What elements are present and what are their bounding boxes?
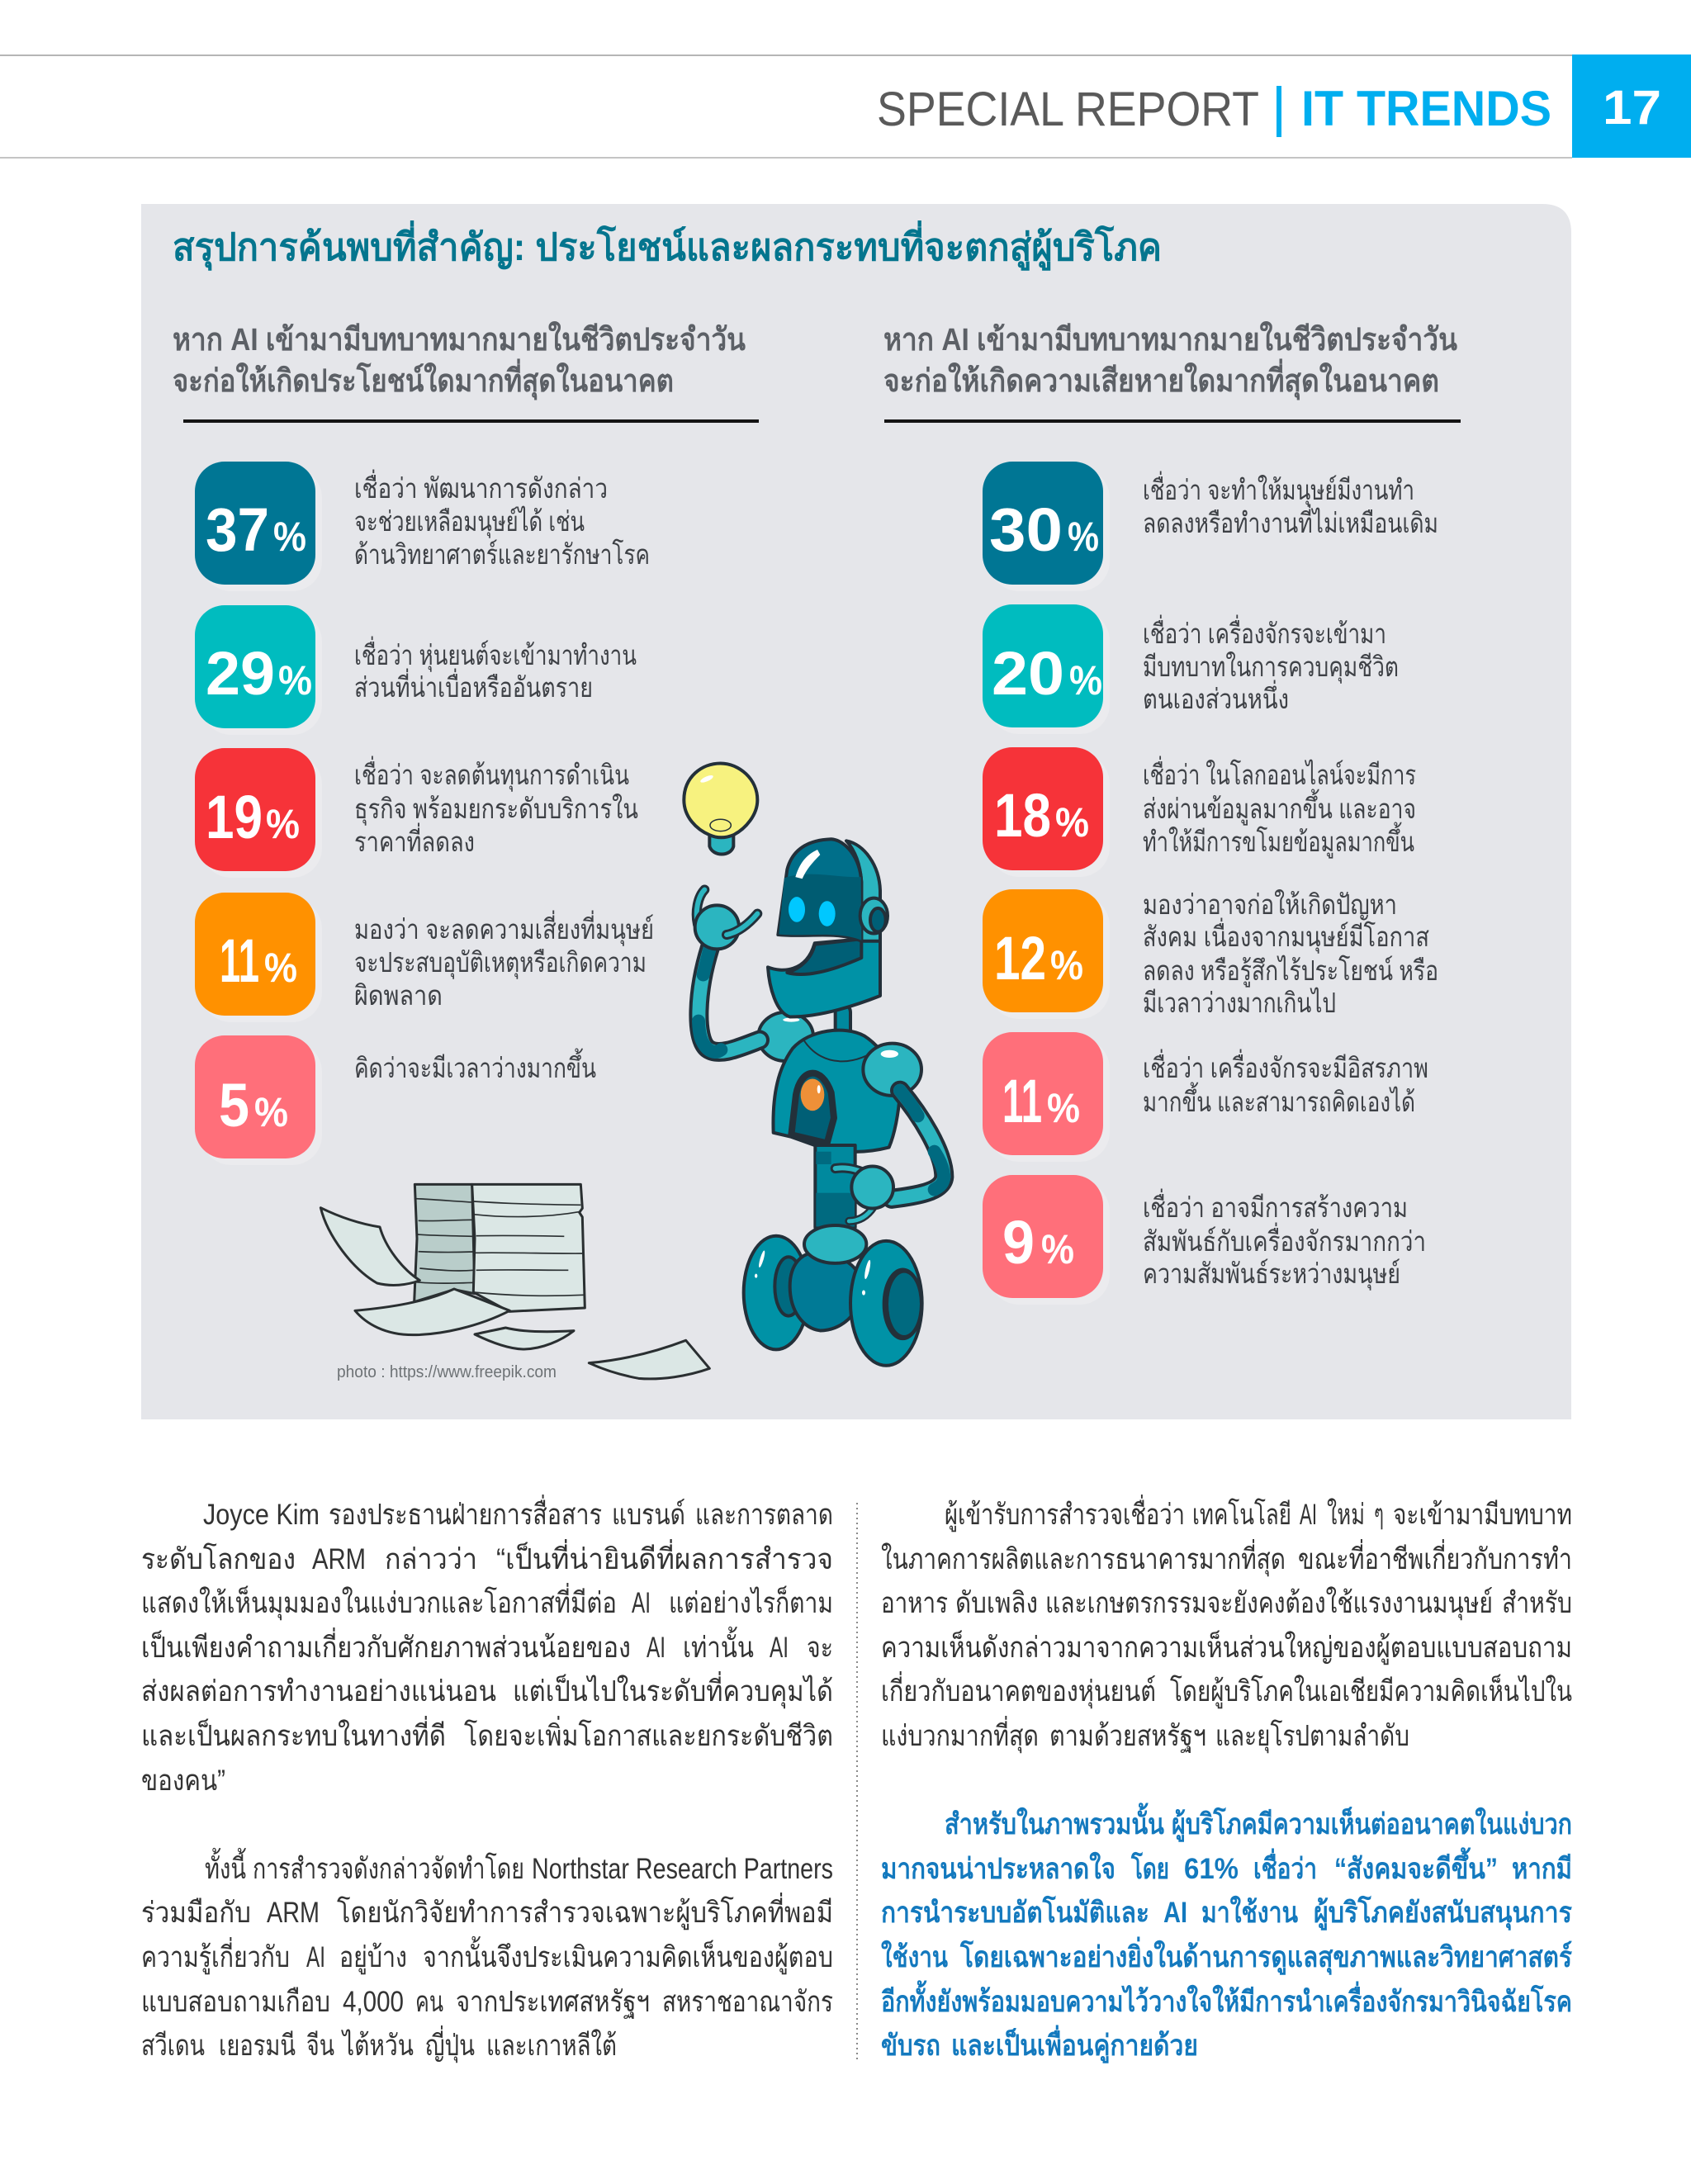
illustration: robot with light bulb: [684, 763, 944, 1366]
paragraph: Joyce Kim quote: AI: [770, 1632, 789, 1664]
benefit item: 19%: [195, 748, 638, 878]
harm item: 12%: %: [1050, 942, 1083, 988]
paragraph: survey method: ความรู้เกี่ยวกับ: [141, 1937, 290, 1974]
paragraph: survey method: โดยนักวิจัยทำการสำรวจเฉพาะผู้บริโภคที่พอมี: [337, 1893, 833, 1930]
robot torso: [773, 1030, 900, 1152]
robot raised arm: [699, 947, 760, 1052]
paragraph: survey method: เยอรมนี: [219, 2030, 296, 2062]
harm item: 18%: %: [1055, 799, 1089, 846]
paragraph: survey method: สหราชอาณาจักร: [662, 1986, 833, 2018]
article: left column: [141, 1495, 833, 2063]
harm item: 12%: มีเวลาว่างมากเกินไป: [1143, 987, 1336, 1019]
harm item: 20%: ตนเองส่วนหนึ่ง: [1143, 680, 1289, 715]
paragraph: survey method: ญี่ปุ่น: [425, 2025, 475, 2063]
paragraph: Joyce Kim quote: และการตลาด: [695, 1499, 833, 1531]
benefit item: 29%: 29: [206, 639, 275, 708]
harm item: 18%: เชื่อว่า ในโลกออนไลน์จะมีการ: [1143, 756, 1416, 791]
benefit item: 29%: %: [278, 657, 312, 704]
paragraph: job sectors: และยุโรปตามลำดับ: [1215, 1719, 1409, 1753]
paragraph: Joyce Kim quote: [141, 1495, 833, 1797]
paragraph: survey method: AI: [306, 1941, 325, 1973]
right column heading: หาก AI เข้ามามีบทบาทมากมายในชีวิตประจำวัน: [883, 321, 1457, 358]
harm item: 20%: %: [1069, 657, 1102, 704]
harm item: 30%: [983, 462, 1438, 591]
benefit item: 37%: 37: [206, 495, 269, 564]
robot back shoulder: [758, 1012, 813, 1061]
harm item: 12%: 12: [994, 924, 1046, 993]
harm item: 12%: สังคม เนื่องจากมนุษย์มีโอกาส: [1143, 917, 1429, 954]
paragraph: job sectors: ตามด้วยสหรัฐฯ: [1049, 1720, 1206, 1753]
harm item: 20%: เชื่อว่า เครื่องจักรจะเข้ามา: [1143, 614, 1386, 650]
photo credit: photo : https://www.freepik.com: [337, 1363, 557, 1381]
paragraph: highlighted conclusion: การนำระบบอัตโนมัติและ: [881, 1895, 1149, 1929]
benefit item: 11%: มองว่า จะลดความเสี่ยงที่มนุษย์: [354, 910, 654, 946]
paragraph: job sectors: ขณะที่อาชีพเกี่ยวกับการทำ: [1298, 1539, 1572, 1575]
harm item: 30%: เชื่อว่า จะทำให้มนุษย์มีงานทำ: [1143, 471, 1414, 507]
paragraph: Joyce Kim quote: แสดงให้เห็นมุมมองในแง่บวกและโอกาสที่มีต่อ: [141, 1583, 617, 1620]
icon: light bulb: [684, 763, 757, 855]
paragraph: job sectors: เทคโนโลยี: [1192, 1498, 1291, 1531]
paragraph: survey method: และเกาหลีใต้: [486, 2029, 617, 2062]
benefit item: 19%: 19: [206, 783, 263, 851]
harm item: 9%: 9: [1002, 1208, 1035, 1277]
harm item: 12%: มองว่าอาจก่อให้เกิดปัญหา: [1143, 889, 1397, 921]
paragraph: Joyce Kim quote: AI: [632, 1587, 651, 1619]
right column heading: จะก่อให้เกิดความเสียหายใดมากที่สุดในอนาคต: [883, 358, 1439, 400]
panel: key findings: [141, 204, 1571, 1419]
paragraph: Joyce Kim quote: กล่าวว่า: [385, 1543, 477, 1575]
paragraph: survey method: Northstar Research Partners: [532, 1853, 833, 1885]
paragraph: Joyce Kim quote: โดยจะเพิ่มโอกาสและยกระดับชีวิต: [464, 1716, 833, 1752]
paragraph: job sectors: ๆ: [1374, 1499, 1384, 1531]
robot head: [768, 839, 888, 1017]
paragraph: survey method: การสำรวจดังกล่าวจัดทำโดย: [253, 1852, 524, 1885]
paragraph: survey method: อยู่บ้าง: [339, 1941, 407, 1974]
harm item: 20%: มีบทบาทในการควบคุมชีวิต: [1143, 651, 1399, 684]
paragraph: job sectors: ความเห็นดังกล่าวมาจากความเห็นส่วนใหญ่ของผู้ตอบแบบสอบถาม: [881, 1630, 1572, 1665]
robot bent arm: [892, 1091, 944, 1199]
robot neck: [836, 1007, 850, 1045]
paragraph: survey method: ทั้งนี้: [205, 1847, 247, 1885]
paragraph: Joyce Kim quote: แบรนด์: [612, 1499, 685, 1531]
paragraph: job sectors: ใหม่: [1327, 1498, 1365, 1531]
robot waist column: [815, 1145, 855, 1227]
paragraph: highlighted conclusion: “สังคมจะดีขึ้น”: [1334, 1847, 1498, 1885]
left column heading: หาก AI เข้ามามีบทบาทมากมายในชีวิตประจำวัน: [173, 321, 746, 358]
paragraph: Joyce Kim quote: เท่านั้น: [683, 1626, 754, 1664]
paragraph: Joyce Kim quote: แต่เป็นไปในระดับที่ควบคุมได้: [513, 1671, 833, 1708]
benefit item: 37%: [195, 462, 650, 591]
paragraph: survey method: ร่วมมือกับ: [141, 1897, 251, 1929]
harm item: 11%: %: [1047, 1085, 1080, 1131]
harm item: 12%: ลดลง หรือรู้สึกไร้ประโยชน์ หรือ: [1143, 955, 1438, 988]
paragraph: job sectors: แง่บวกมากที่สุด: [881, 1716, 1039, 1753]
icon: stack of papers: [320, 1184, 709, 1379]
benefit item: 11%: จะประสบอุบัติเหตุหรือเกิดความ: [354, 948, 647, 979]
paragraph: highlighted conclusion: ผู้บริโภคมีความเห็นต่ออนาคตในแง่บวก: [1172, 1806, 1572, 1842]
paragraph: Joyce Kim quote: ระดับโลกของ: [141, 1542, 296, 1575]
paragraph: highlighted conclusion: สำหรับในภาพรวมนั้น: [945, 1803, 1164, 1841]
paragraph: job sectors: สำหรับ: [1502, 1587, 1572, 1619]
section label: IT trends: IT TRENDS: [1301, 81, 1551, 136]
harm item: 18%: 18: [994, 781, 1051, 850]
panel title: สรุปการค้นพบที่สำคัญ: ประโยชน์และผลกระทบที่จะตกสู่ผู้บริโภค: [173, 220, 1162, 271]
paragraph: survey method: จากนั้นจึงประเมินความคิดเห็นของผู้ตอบ: [423, 1935, 833, 1974]
paragraph: survey method: จีน: [306, 2030, 334, 2062]
article: right column: [881, 1495, 1572, 2063]
paragraph: highlighted conclusion: ผู้บริโภคยังสนับสนุนการ: [1314, 1895, 1572, 1931]
benefit item: 5%: 5: [219, 1071, 249, 1139]
paragraph: survey method: ARM: [267, 1897, 320, 1929]
paragraph: survey method: ไต้หวัน: [341, 2029, 414, 2062]
left column heading: [173, 321, 759, 423]
paragraph: highlighted conclusion: หากมี: [1512, 1853, 1572, 1885]
paragraph: job sectors: ดับเพลิง: [955, 1587, 1038, 1619]
paragraph: Joyce Kim quote: Joyce Kim: [203, 1499, 320, 1531]
paragraph: highlighted conclusion: [881, 1803, 1572, 2063]
robot base: [790, 1225, 866, 1330]
robot front shoulder: [863, 1044, 921, 1096]
harm item: 11%: [983, 1032, 1428, 1162]
harm item: 30%: %: [1068, 514, 1099, 560]
benefit item: 19%: ธุรกิจ พร้อมยกระดับบริการใน: [354, 794, 638, 826]
paragraph: Joyce Kim quote: และเป็นผลกระทบในทางที่ดี: [141, 1716, 446, 1752]
harm item: 9%: ความสัมพันธ์ระหว่างมนุษย์: [1143, 1258, 1400, 1291]
paragraph: job sectors: จะเข้ามามีบทบาท: [1393, 1499, 1572, 1531]
benefit item: 37%: จะช่วยเหลือมนุษย์ได้ เช่น: [354, 505, 585, 538]
page number box: [1572, 54, 1691, 158]
benefit item: 11%: ผิดพลาด: [354, 981, 443, 1011]
benefit item: 19%: %: [266, 801, 300, 847]
benefit item: 11%: [195, 893, 654, 1022]
benefit item: 11%: %: [264, 945, 297, 991]
benefit item: 29%: เชื่อว่า หุ่นยนต์จะเข้ามาทำงาน: [354, 636, 637, 672]
harm item: 18%: ทำให้มีการขโมยข้อมูลมากขึ้น: [1143, 822, 1414, 859]
robot raised hand: [695, 889, 757, 949]
paragraph: highlighted conclusion: ใช้งาน: [881, 1940, 948, 1973]
paragraph: Joyce Kim quote: ของคน”: [141, 1765, 225, 1797]
harm item: 11%: 11: [1002, 1067, 1042, 1135]
harm item: 9%: สัมพันธ์กับเครื่องจักรมากกว่า: [1143, 1222, 1426, 1258]
harm item: 30%: 30: [989, 495, 1063, 564]
robot left wheel: [744, 1236, 808, 1349]
left column heading: จะก่อให้เกิดประโยชน์ใดมากที่สุดในอนาคต: [173, 358, 674, 400]
paragraph: Joyce Kim quote: AI: [647, 1632, 666, 1664]
paragraph: job sectors: เกี่ยวกับอนาคตของหุ่นยนต์: [881, 1671, 1156, 1708]
robot right wheel: [850, 1241, 922, 1366]
paragraph: job sectors: อาหาร: [881, 1587, 948, 1619]
harm item: 30%: ลดลงหรือทำงานที่ไม่เหมือนเดิม: [1143, 504, 1438, 539]
paragraph: highlighted conclusion: และเป็นเพื่อนคู่กายด้วย: [951, 2025, 1198, 2063]
benefit item: 37%: %: [273, 514, 306, 560]
section label: special report: SPECIAL REPORT: [877, 83, 1259, 136]
paragraph: survey method: แบบสอบถามเกือบ: [141, 1986, 330, 2018]
benefit item: 19%: เชื่อว่า จะลดต้นทุนการดำเนิน: [354, 756, 629, 792]
paragraph: job sectors: โดยผู้บริโภคในเอเชียมีความคิดเห็นไปใน: [1170, 1674, 1572, 1708]
page header: [0, 54, 1691, 159]
paragraph: Joyce Kim quote: ส่งผลต่อการทำงานอย่างแน่นอน: [141, 1675, 496, 1708]
separator bar: [1277, 86, 1281, 137]
harm item: 11%: เชื่อว่า เครื่องจักรจะมีอิสรภาพ: [1143, 1049, 1428, 1084]
paragraph: survey method: จากประเทศสหรัฐฯ: [456, 1986, 650, 2019]
page number box: 17: [1603, 81, 1661, 135]
harm item: 9%: [983, 1175, 1426, 1305]
paragraph: highlighted conclusion: โดย: [1130, 1851, 1169, 1885]
paragraph: job sectors: และเกษตรกรรมจะยังคงต้องใช้แรงงานมนุษย์: [1045, 1586, 1493, 1620]
paragraph: Joyce Kim quote: ARM: [312, 1543, 366, 1575]
paragraph: Joyce Kim quote: เป็นเพียงคำถามเกี่ยวกับศักยภาพส่วนน้อยของ: [141, 1627, 631, 1664]
harm item: 9%: %: [1041, 1226, 1074, 1272]
benefit item: 37%: ด้านวิทยาศาตร์และยารักษาโรค: [354, 538, 650, 571]
paragraph: Joyce Kim quote: “เป็นที่น่ายินดีที่ผลการสำรวจ: [496, 1539, 833, 1575]
paragraph: survey method: 4,000: [343, 1986, 404, 2018]
harm item: 20%: 20: [992, 639, 1064, 708]
robot hip hand: [836, 1167, 893, 1221]
paragraph: job sectors: ในภาคการผลิตและการธนาคารมากที่สุด: [881, 1539, 1286, 1576]
benefit item: 11%: 11: [220, 926, 259, 995]
benefit item: 5%: [195, 1035, 596, 1165]
paragraph: highlighted conclusion: 61%: [1184, 1853, 1239, 1885]
paragraph: highlighted conclusion: มาใช้งาน: [1201, 1895, 1298, 1929]
paragraph: highlighted conclusion: มากจนน่าประหลาดใจ: [881, 1851, 1115, 1885]
benefit item: 37%: เชื่อว่า พัฒนาการดังกล่าว: [354, 469, 608, 505]
right column heading: [883, 321, 1461, 423]
paragraph: Joyce Kim quote: จะ: [807, 1632, 833, 1664]
paragraph: highlighted conclusion: ขับรถ: [881, 2030, 940, 2062]
harm item: 20%: [983, 604, 1399, 734]
harm item: 18%: ส่งผ่านข้อมูลมากขึ้น และอาจ: [1143, 789, 1416, 826]
paragraph: survey method: คน: [415, 1986, 443, 2018]
harm item: 18%: [983, 747, 1416, 877]
harm item: 11%: มากขึ้น และสามารถคิดเองได้: [1143, 1082, 1415, 1118]
benefit item: 29%: [195, 605, 637, 735]
harm item: 12%: [983, 889, 1438, 1019]
paragraph: Joyce Kim quote: รองประธานฝ่ายการสื่อสาร: [329, 1495, 602, 1531]
paragraph: job sectors: AI: [1300, 1499, 1317, 1531]
paragraph: highlighted conclusion: AI: [1163, 1897, 1187, 1929]
paragraph: survey method: [141, 1847, 833, 2063]
benefit item: 5%: คิดว่าจะมีเวลาว่างมากขึ้น: [354, 1048, 596, 1084]
paragraph: survey method: สวีเดน: [141, 2030, 205, 2062]
benefit item: 19%: ราคาที่ลดลง: [354, 822, 475, 858]
benefit item: 5%: %: [254, 1089, 288, 1135]
paragraph: highlighted conclusion: โดยเฉพาะอย่างยิ่งในด้านการดูแลสุขภาพและวิทยาศาสตร์: [959, 1936, 1572, 1975]
paragraph: highlighted conclusion: เชื่อว่า: [1253, 1848, 1317, 1885]
paragraph: Joyce Kim quote: แต่อย่างไรก็ตาม: [669, 1585, 833, 1619]
paragraph: job sectors: [881, 1495, 1572, 1753]
harm item: 9%: เชื่อว่า อาจมีการสร้างความ: [1143, 1188, 1408, 1224]
paragraph: job sectors: ผู้เข้ารับการสำรวจเชื่อว่า: [945, 1495, 1185, 1532]
benefit item: 29%: ส่วนที่น่าเบื่อหรืออันตราย: [354, 668, 593, 704]
